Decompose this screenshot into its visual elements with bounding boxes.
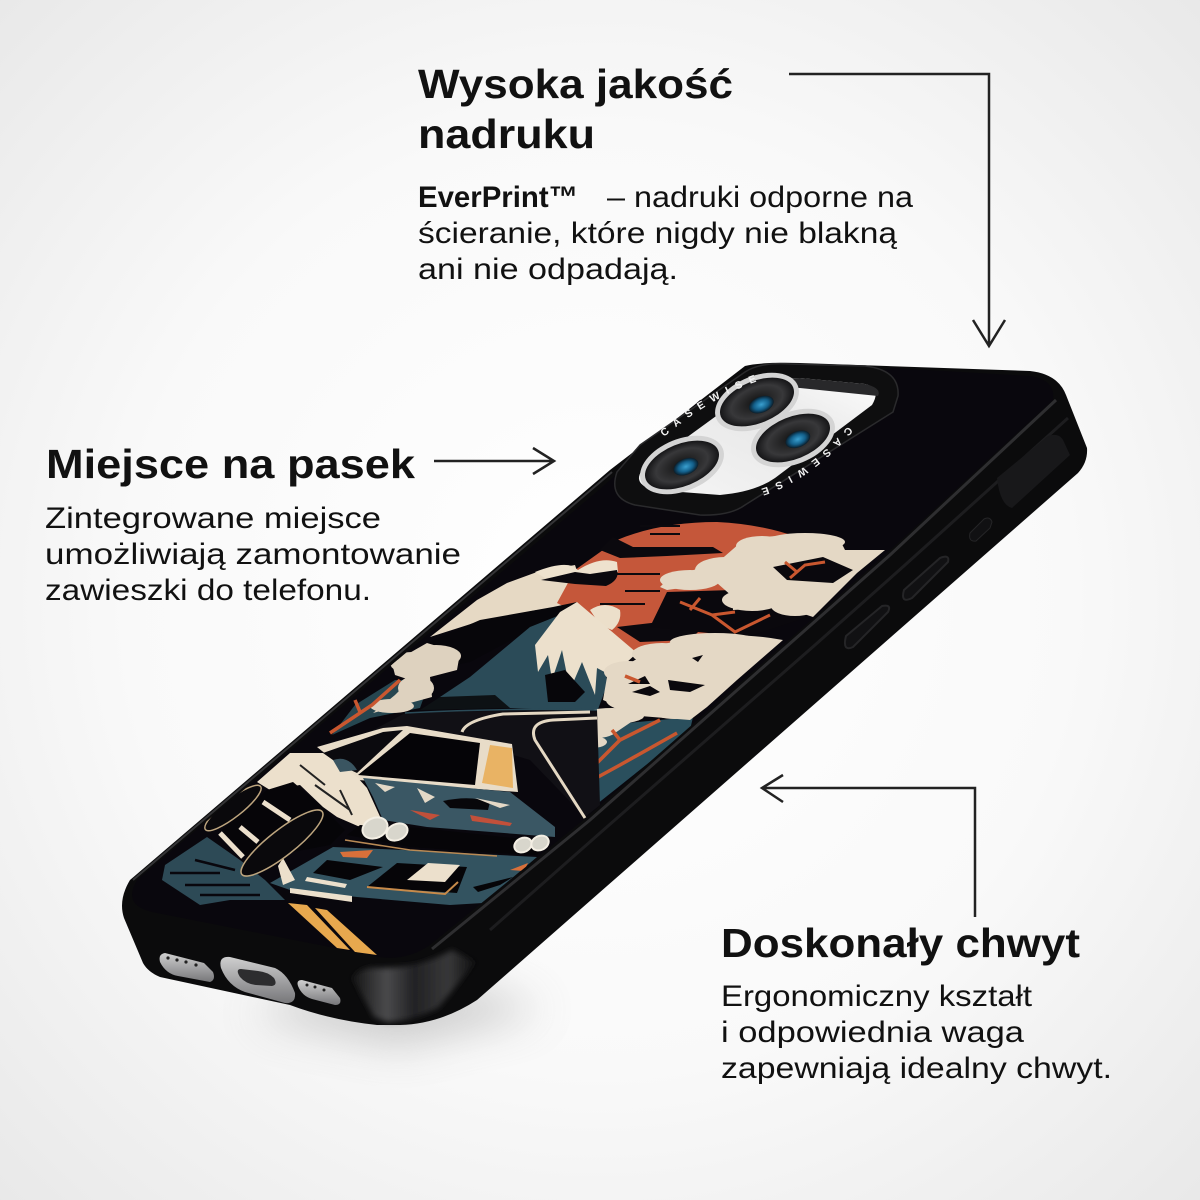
windshield xyxy=(358,733,480,785)
action button xyxy=(845,606,889,648)
hood xyxy=(363,778,555,837)
body text: ani nie odpadają. xyxy=(418,253,678,286)
yellow road stripes xyxy=(288,903,377,955)
lower body xyxy=(270,847,537,905)
car xyxy=(200,726,555,905)
heading xyxy=(418,61,733,157)
arrow: strap slot xyxy=(434,448,554,474)
tree branches xyxy=(598,674,678,778)
right intake xyxy=(473,877,513,892)
body text: EverPrint™ xyxy=(418,181,578,214)
glossy bottom corner xyxy=(352,950,476,1022)
logo top: CASEWISE xyxy=(661,374,756,436)
heading: Doskonały chwyt xyxy=(721,920,1080,966)
volume button xyxy=(903,557,948,600)
body text: Zintegrowane miejsce xyxy=(45,502,381,535)
body text xyxy=(418,181,913,286)
intake xyxy=(367,863,467,893)
cloud: cream top black bottom xyxy=(535,560,618,586)
car side black xyxy=(268,782,297,790)
rear window xyxy=(482,745,513,788)
headlights xyxy=(361,816,550,854)
dark gaps xyxy=(628,655,705,696)
body text xyxy=(45,502,461,607)
left tree xyxy=(330,643,461,735)
left rim line xyxy=(133,472,612,880)
lens top xyxy=(706,361,808,443)
dark hollow with branch xyxy=(773,557,853,583)
wheels xyxy=(204,784,324,877)
callout: grip xyxy=(721,920,1112,1085)
red sun xyxy=(557,522,800,653)
left speaker grill xyxy=(160,953,214,982)
bezel groove xyxy=(490,418,1068,930)
road xyxy=(345,709,600,818)
printed face xyxy=(162,400,885,955)
lens right xyxy=(742,397,844,479)
body text: – nadruki odporne na xyxy=(607,181,913,214)
side sill xyxy=(220,802,290,857)
right speaker grill xyxy=(298,980,340,1005)
inner ring shadow xyxy=(745,378,879,398)
arrow: print quality xyxy=(789,74,1005,346)
turn signals xyxy=(340,850,528,871)
teal undergrowth xyxy=(598,718,693,802)
small side button xyxy=(970,518,992,541)
foliage mass xyxy=(597,636,783,736)
case body xyxy=(122,363,1087,1025)
moon disc xyxy=(590,605,620,630)
foliage bumps xyxy=(660,533,845,616)
logo bottom: CASEWISE xyxy=(761,428,852,496)
body text: ścieranie, które nigdy nie blakną xyxy=(418,217,897,250)
side window xyxy=(323,730,403,773)
charging port xyxy=(220,957,295,1003)
body text: i odpowiednia waga xyxy=(721,1016,1024,1049)
camera window xyxy=(639,378,876,495)
foliage bumps xyxy=(594,633,748,748)
car cabin roof xyxy=(317,726,518,792)
body text: zapewniają idealny chwyt. xyxy=(721,1052,1112,1085)
cream sky band xyxy=(430,565,590,637)
upper tree xyxy=(650,533,885,637)
road shadows xyxy=(162,837,285,905)
phone shadow xyxy=(250,990,545,1045)
callout: strap slot xyxy=(45,441,461,607)
body text: zawieszki do telefonu. xyxy=(45,574,371,607)
lens left xyxy=(631,424,733,506)
heading: Wysoka jakość xyxy=(418,61,733,107)
lower tree xyxy=(594,633,783,802)
foliage mass xyxy=(660,535,885,617)
left intake xyxy=(313,860,383,880)
body text xyxy=(721,980,1112,1085)
side pad near top xyxy=(997,435,1070,508)
cream flank xyxy=(257,753,383,827)
callout: print quality xyxy=(418,61,913,286)
body text: Ergonomiczny kształt xyxy=(721,980,1033,1013)
heading: Miejsce na pasek xyxy=(46,441,415,487)
body text: umożliwiają zamontowanie xyxy=(45,538,461,571)
mountain xyxy=(420,602,637,712)
heading: nadruku xyxy=(418,111,595,157)
dark under canopy xyxy=(652,590,773,633)
bezel highlight xyxy=(432,400,1056,949)
phone case xyxy=(122,362,1088,1026)
black grille band xyxy=(358,825,363,827)
camera island xyxy=(614,362,899,516)
arrow: grip xyxy=(762,775,975,917)
